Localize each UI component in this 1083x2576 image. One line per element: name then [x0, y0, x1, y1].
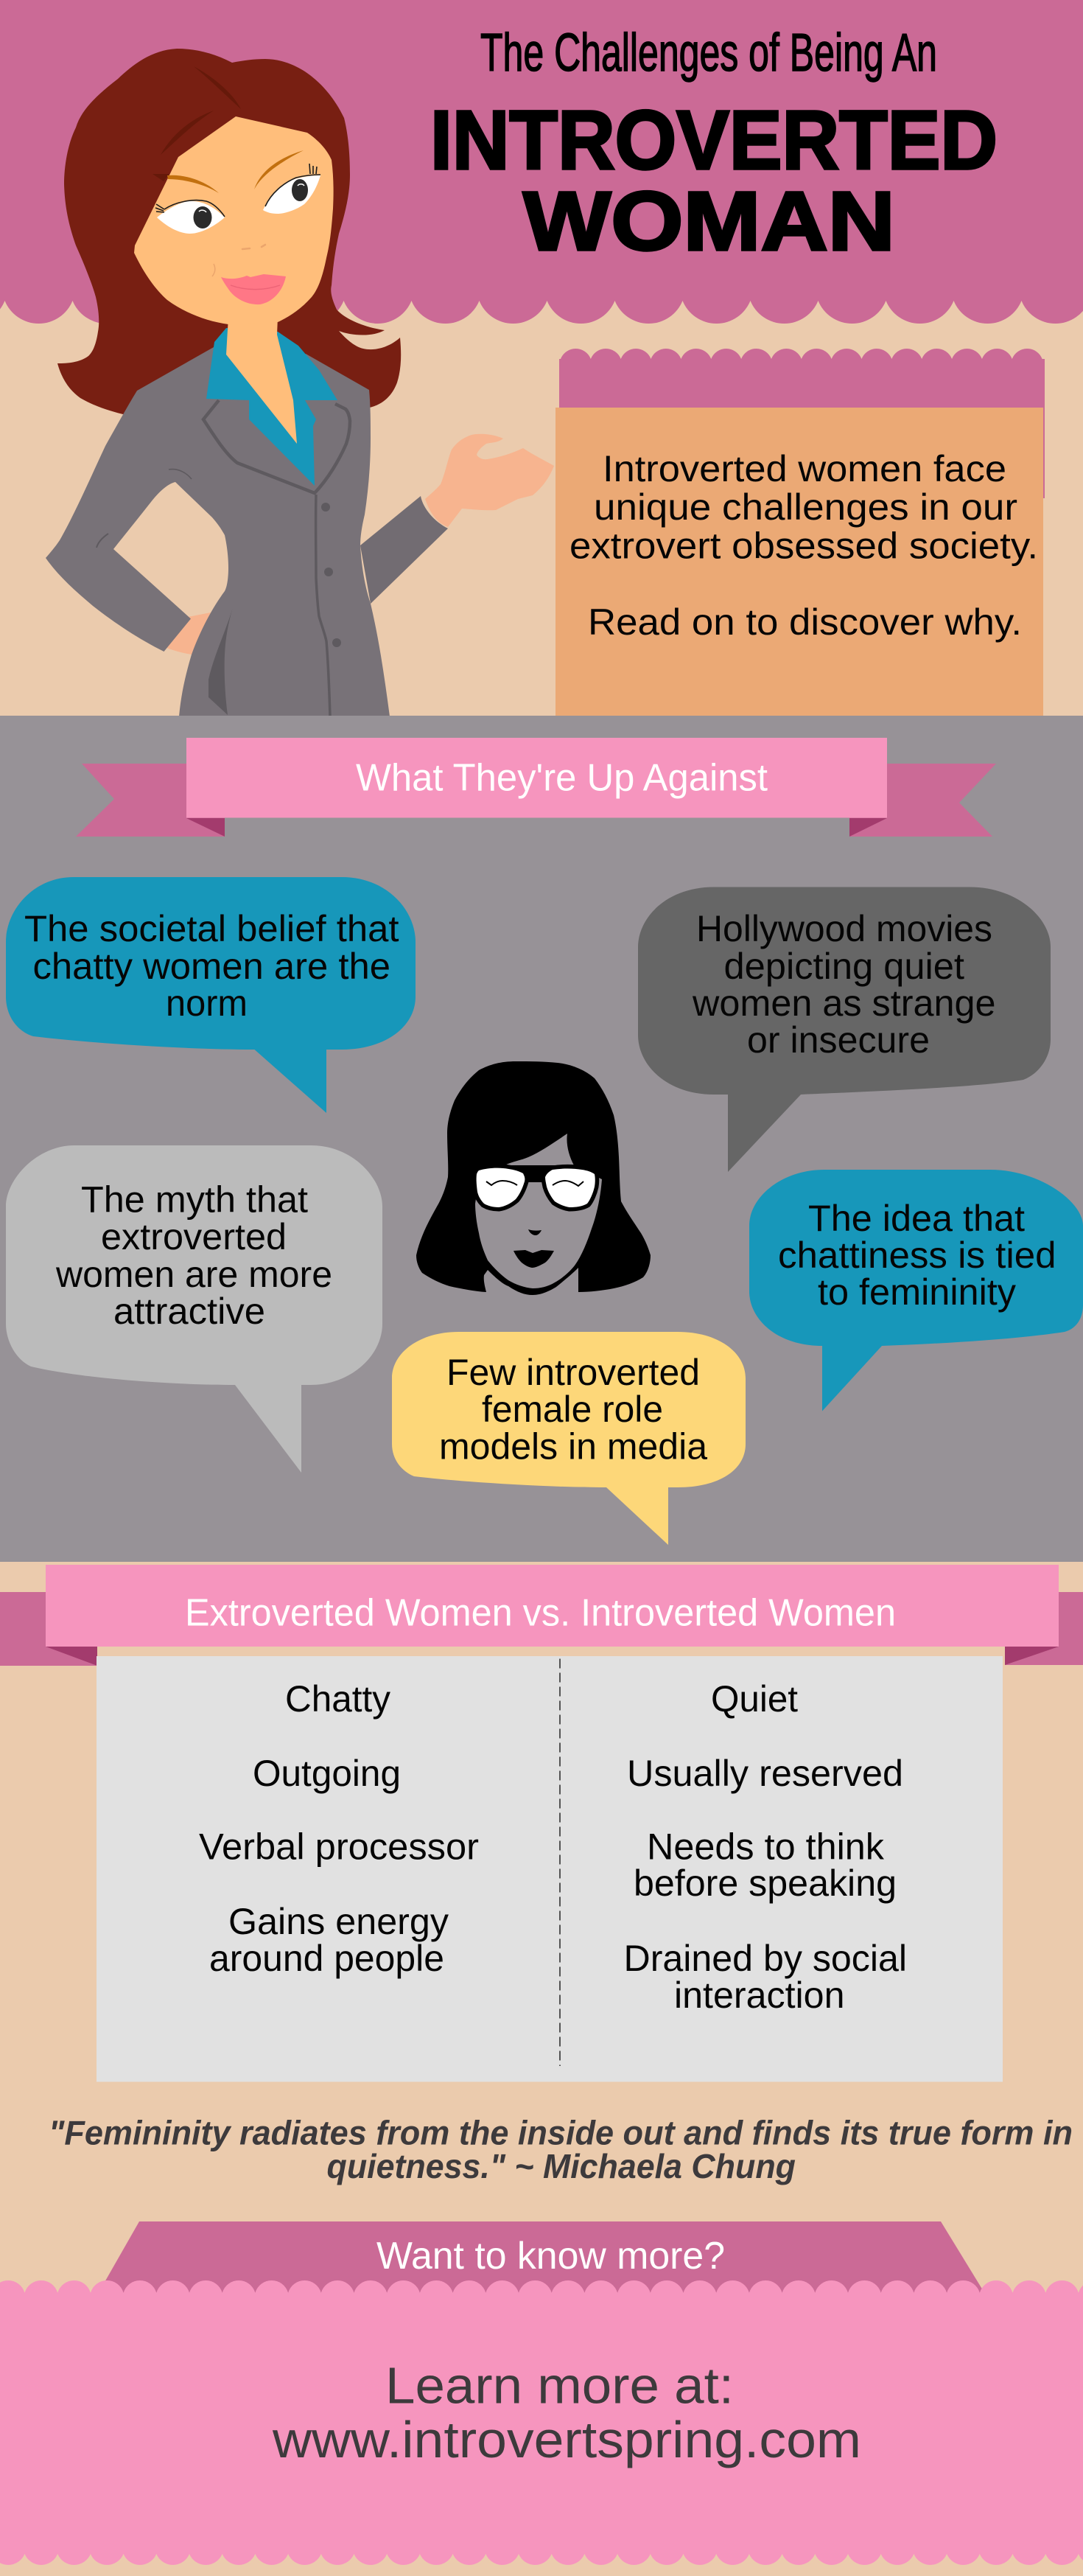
- speech bubble: role models: [392, 1332, 746, 1545]
- card front: [555, 408, 1043, 717]
- hand: left hip: [164, 612, 211, 655]
- speech bubble: societal belief: chatty women are the: [32, 946, 390, 987]
- eyebrows: [167, 150, 304, 193]
- speech bubble: myth: attractive: [113, 1291, 265, 1332]
- right eye: [263, 164, 320, 214]
- column: extroverted traits: Gains energy: [228, 1901, 449, 1942]
- panel: intro card: [555, 349, 1045, 717]
- column: introverted traits: before speaking: [634, 1863, 897, 1904]
- comparison table: [97, 1647, 1005, 2081]
- face: [475, 1134, 602, 1288]
- panel: what they're up against: [0, 716, 1083, 1562]
- panel: comparison: [0, 1565, 1083, 2081]
- speech bubble: societal belief: The societal belief that: [24, 908, 399, 949]
- title: INTROVERTED: [430, 94, 998, 186]
- suit jacket: [46, 347, 390, 716]
- suit fold: [208, 609, 233, 715]
- speech bubble: societal belief: norm: [166, 982, 248, 1024]
- lips: [221, 274, 286, 304]
- column: introverted traits: [623, 1678, 907, 2016]
- speech bubble: femininity: to femininity: [818, 1271, 1016, 1313]
- speech bubble: role models: Few introverted: [446, 1352, 700, 1393]
- intro text: Read on to discover why.: [588, 601, 1022, 643]
- tab: want to know more: [98, 2221, 985, 2294]
- panel: scalloped header band: [0, 0, 1083, 324]
- quote: "Femininity radiates from the inside out and finds its true form in: [49, 2114, 1073, 2152]
- title: [430, 24, 998, 268]
- speech bubble: hollywood: or insecure: [747, 1019, 930, 1061]
- nose: [528, 1229, 542, 1235]
- call to action: www.introvertspring.com: [272, 2411, 861, 2468]
- quote: [49, 2114, 1073, 2185]
- icon: woman with glasses: [416, 1061, 651, 1295]
- arm: right sleeve: [360, 496, 448, 604]
- column: introverted traits: Drained by social: [623, 1938, 907, 1979]
- ribbon heading: Extroverted Women vs. Introverted Women: [185, 1592, 896, 1635]
- blue blouse collar: [206, 328, 337, 486]
- illustration: businesswoman: [46, 49, 554, 716]
- speech bubble: myth: The myth that: [81, 1179, 308, 1221]
- hair: [57, 49, 401, 442]
- ribbon heading: What They're Up Against: [356, 756, 768, 799]
- speech bubble: myth: women are more: [55, 1254, 332, 1295]
- suit details: [97, 400, 350, 716]
- speech bubble: femininity: The idea that: [808, 1198, 1025, 1239]
- column: extroverted traits: Chatty: [285, 1678, 390, 1720]
- cheek line: [212, 264, 215, 276]
- suit buttons: [321, 503, 341, 647]
- card back with scallops: [559, 349, 1045, 498]
- column: extroverted traits: Verbal processor: [199, 1826, 479, 1868]
- speech bubble: myth: [6, 1145, 382, 1473]
- speech bubble: role models: female role: [482, 1389, 663, 1430]
- intro text: [569, 448, 1038, 643]
- nose: [242, 245, 265, 249]
- face: [134, 116, 334, 324]
- column: introverted traits: Quiet: [711, 1678, 798, 1720]
- quote: quietness." ~ Michaela Chung: [327, 2147, 796, 2185]
- glasses: [477, 1165, 595, 1207]
- call to action: [272, 2357, 861, 2468]
- neck: [226, 317, 297, 444]
- hair strands: [153, 66, 241, 181]
- column: introverted traits: Needs to think: [647, 1826, 885, 1868]
- speech bubble: role models: models in media: [439, 1425, 707, 1467]
- speech bubble: hollywood: Hollywood movies: [696, 908, 992, 949]
- closed eyes: [486, 1181, 583, 1186]
- column: extroverted traits: [199, 1678, 479, 1979]
- intro text: Introverted women face: [603, 448, 1006, 489]
- speech bubble: hollywood: women as strange: [692, 982, 996, 1024]
- lips: [514, 1250, 554, 1268]
- speech bubble: myth: extroverted: [101, 1216, 287, 1257]
- speech bubble: societal belief: [6, 877, 416, 1113]
- left eye: [155, 200, 225, 234]
- ribbon heading: [76, 738, 996, 837]
- speech bubble: femininity: [749, 1170, 1083, 1411]
- tab: want to know more: Want to know more?: [376, 2235, 725, 2277]
- title: WOMAN: [523, 175, 895, 268]
- speech bubble: femininity: chattiness is tied: [778, 1235, 1056, 1276]
- ribbon heading: [0, 1565, 1083, 1666]
- speech bubble: hollywood: [638, 887, 1051, 1172]
- column: extroverted traits: Outgoing: [253, 1753, 401, 1794]
- intro text: unique challenges in our: [594, 486, 1017, 528]
- speech bubble: hollywood: depicting quiet: [723, 946, 964, 987]
- column: extroverted traits: around people: [209, 1938, 444, 1979]
- column: introverted traits: Usually reserved: [627, 1753, 903, 1794]
- call to action: Learn more at:: [385, 2357, 734, 2415]
- column: introverted traits: interaction: [674, 1975, 844, 2016]
- intro text: extrovert obsessed society.: [569, 525, 1038, 566]
- hand: open palm: [425, 434, 554, 527]
- panel: footer: [0, 2280, 1083, 2565]
